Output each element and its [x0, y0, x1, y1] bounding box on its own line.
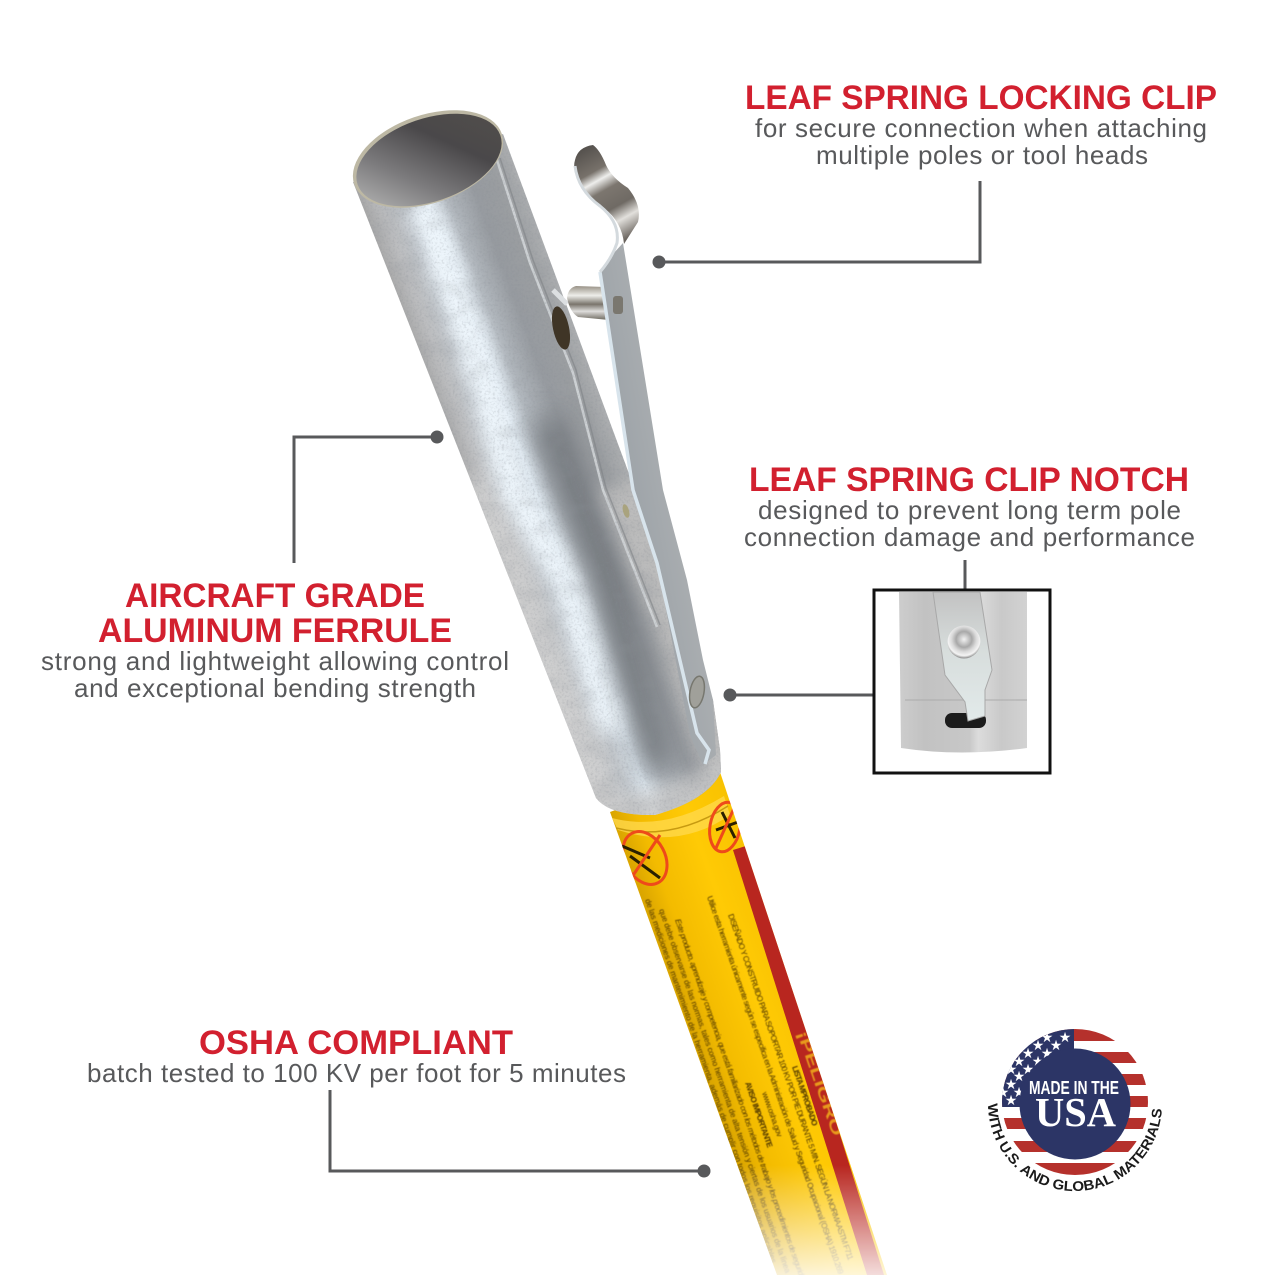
- aluminum ferrule tube: [352, 110, 721, 815]
- clip head: [574, 145, 639, 244]
- flag disc: ★: [1032, 1054, 1044, 1070]
- pole warning text: LISTA MPROBADO: [790, 1065, 819, 1127]
- callout: locking clip text: LEAF SPRING LOCKING CLIP: [745, 79, 1217, 117]
- callout: locking clip text: for secure connection when attaching: [755, 113, 1207, 143]
- clip pin: [567, 286, 609, 320]
- pole warning text: Este producto, aprendizaje y competencia, que está familiarizado con los métodos de trabajo y los procedimientos de seguridad: [673, 918, 808, 1280]
- callout: OSHA leader: [330, 1090, 710, 1178]
- flag disc: ★: [1032, 1038, 1044, 1054]
- callout: ferrule text: ALUMINUM FERRULE: [98, 612, 452, 650]
- lighter bottom collar: [606, 762, 721, 815]
- callout: locking clip text: multiple poles or tool heads: [816, 140, 1148, 170]
- callout: ferrule text: strong and lightweight allowing control: [41, 646, 509, 676]
- callout: notch text: connection damage and performance: [744, 522, 1195, 552]
- pole warning text: www.osha.gov: [760, 1090, 784, 1138]
- pole warning text: que debe observarse de las normas, tales como herramienta de alta tensión y ciertas de los usuarios de la línea: [657, 908, 792, 1275]
- clip hole: [549, 305, 573, 351]
- leaf spring locking clip: [567, 145, 716, 765]
- callout: ferrule leader: [294, 430, 444, 563]
- flag disc: ★: [1005, 1077, 1017, 1093]
- badge wording: MADE IN THE: [1029, 1078, 1119, 1098]
- curved caption: WITH U.S. AND GLOBAL MATERIALS: [988, 1103, 1162, 1192]
- tube opening: [340, 92, 516, 226]
- notch slot: [945, 713, 986, 728]
- callout: OSHA text: [87, 1024, 626, 1088]
- callout: notch text: designed to prevent long term pole: [758, 495, 1181, 525]
- dark band: [545, 420, 660, 770]
- callout: OSHA text: OSHA COMPLIANT: [199, 1024, 513, 1062]
- prohibition symbols: [622, 800, 740, 886]
- flag disc: ★: [1059, 1030, 1071, 1046]
- callout: OSHA text: batch tested to 100 KV per foot for 5 minutes: [87, 1058, 626, 1088]
- clip strip: [600, 243, 716, 765]
- pole warning text: ¡PELIGRO: [793, 1029, 846, 1139]
- clip plate: [933, 592, 992, 721]
- clip rivet: [613, 296, 623, 314]
- pole warning text: AVISO IMPORTANTE: [743, 1081, 775, 1149]
- pole warning text: Utilice esta herramienta únicamente según se especifica en la Administración de Salud y Seguridad Ocupacional (OSHA) 1910.269: [705, 895, 845, 1276]
- callout: ferrule text: AIRCRAFT GRADE: [125, 577, 425, 615]
- pole warning text: [643, 895, 855, 1280]
- flag disc: ★: [1050, 1038, 1062, 1054]
- pole warning text: de las mediciones de mantenimiento de la herramienta, además de cumplir con todos los requisitos aplicables: [643, 898, 778, 1264]
- yellow fiberglass pole: [610, 772, 900, 1280]
- flag disc: ★: [997, 1085, 1009, 1101]
- flag disc: ★: [1022, 1062, 1034, 1078]
- callout: ferrule text: [41, 577, 509, 703]
- red stripe: [733, 845, 884, 1275]
- callout: notch text: LEAF SPRING CLIP NOTCH: [749, 461, 1189, 499]
- flag disc: ★: [1005, 1093, 1017, 1109]
- notch rivet: [948, 626, 980, 658]
- flag disc: [997, 1028, 1150, 1178]
- callout: ferrule text: and exceptional bending strength: [74, 673, 476, 703]
- inset: clip notch detail: [874, 590, 1050, 773]
- callout: notch leaders: [724, 560, 965, 702]
- lighter flange: [596, 482, 721, 781]
- flag disc: ★: [1013, 1085, 1025, 1101]
- flag disc: ★: [1013, 1069, 1025, 1085]
- callout: locking clip text: [745, 79, 1217, 170]
- navy center: [1020, 1048, 1130, 1160]
- flag disc: ★: [1005, 1062, 1017, 1078]
- flag disc: ★: [1041, 1046, 1053, 1062]
- badge: made in the USA: [988, 1029, 1162, 1192]
- callout: locking clip leader: [652, 181, 980, 268]
- flag disc: ★: [1022, 1046, 1034, 1062]
- flag disc: ★: [1041, 1030, 1053, 1046]
- ferrule rivet and clip tip: [621, 503, 707, 709]
- highlight band: [423, 205, 613, 730]
- callout: notch text: [744, 461, 1195, 552]
- seam ridge: [497, 160, 657, 627]
- flag disc: ★: [1013, 1054, 1025, 1070]
- pole warning text: DISEÑADO Y CONSTRUIDO PARA SOPORTAR 100 KV POR PIE DURANTE 5 MIN. SEGÚN LA NORMA ASTM F711: [726, 913, 855, 1262]
- light left band: [470, 480, 600, 800]
- badge: made in the USA: USA: [1035, 1089, 1116, 1135]
